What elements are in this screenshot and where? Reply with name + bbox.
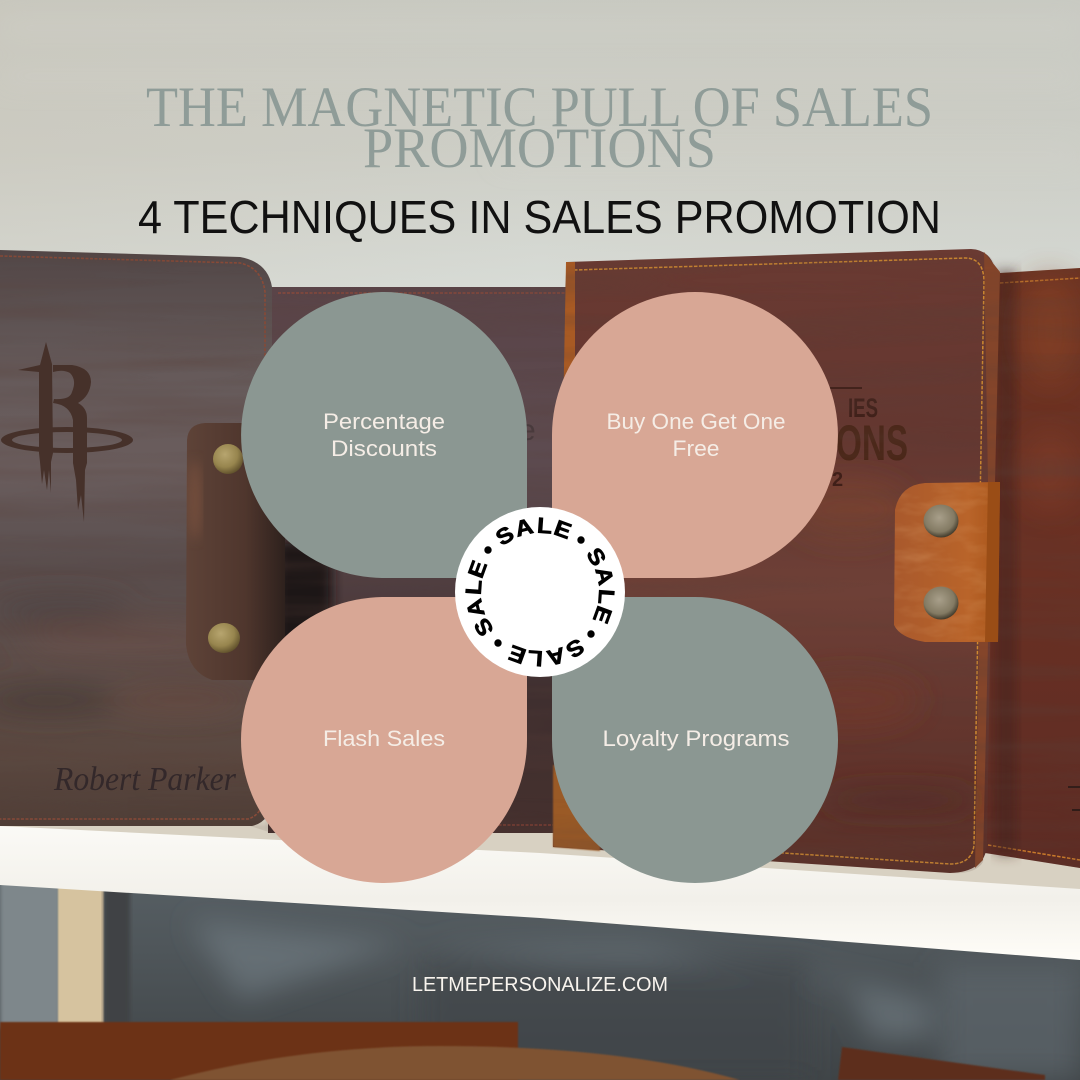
notebook: Rockets grey leather [0, 250, 272, 826]
background photo: shelf and lower cabinet [0, 820, 1080, 1080]
petal: loyalty programs: Loyalty Programs [602, 726, 790, 751]
sale badge: A [591, 564, 619, 588]
embossed notebook lettering: ONS [836, 415, 908, 471]
sale badge: L [536, 513, 553, 538]
embossed notebook lettering [830, 387, 908, 491]
logo: rockets engraving [1, 342, 133, 522]
leather grain streaks [0, 248, 1080, 876]
sale badge: A [461, 596, 489, 620]
sale badge: A [512, 513, 536, 541]
notebook strap: dark left [186, 423, 285, 680]
petal: percentage discounts: Percentage [323, 409, 445, 434]
sale badge: L [594, 588, 619, 605]
engraved name: Robert Parker [53, 761, 237, 798]
website footer: LETMEPERSONALIZE.COM [412, 974, 668, 996]
title: THE MAGNETIC PULL OF SALES [146, 76, 933, 139]
sale badge: E [505, 640, 529, 669]
petal: buy one get one free: Free [672, 436, 720, 461]
notebook: far right [980, 268, 1080, 868]
sale badge [455, 507, 625, 677]
sale badge: S [562, 634, 589, 663]
sale badge: E [588, 603, 617, 627]
sale badge: L [527, 646, 544, 671]
petal: buy one get one free: Buy One Get One [606, 409, 786, 434]
petal: percentage discounts: Discounts [331, 436, 437, 461]
sale badge: S [469, 614, 498, 641]
icon: brass rivets [208, 444, 243, 653]
icon: steel rivets [924, 504, 958, 620]
subtitle: 4 TECHNIQUES IN SALES PROMOTION [138, 191, 941, 243]
title: PROMOTIONS [363, 117, 716, 180]
petal: flash sales [241, 597, 527, 883]
sale badge: A [544, 643, 568, 671]
petal: loyalty programs [552, 597, 838, 883]
embossed notebook lettering: IES [848, 393, 878, 423]
background photo: wall [0, 0, 1080, 300]
sale badge: E [463, 557, 492, 581]
notebook strap: cognac right [890, 480, 1002, 644]
notebook: cognac leather front [553, 249, 1000, 873]
petal: flash sales: Flash Sales [323, 726, 445, 751]
sale badge: E [551, 515, 575, 544]
notebook: dark middle [268, 287, 570, 833]
notebook: dark middle: e [519, 414, 536, 447]
sale badge: L [461, 579, 486, 596]
petal: percentage discounts [241, 292, 527, 578]
sale badge: S [582, 543, 611, 570]
title [146, 76, 933, 180]
sale badge: S [491, 521, 518, 550]
embossed notebook lettering: 2 [832, 469, 843, 491]
petal: buy one get one free [552, 292, 838, 578]
